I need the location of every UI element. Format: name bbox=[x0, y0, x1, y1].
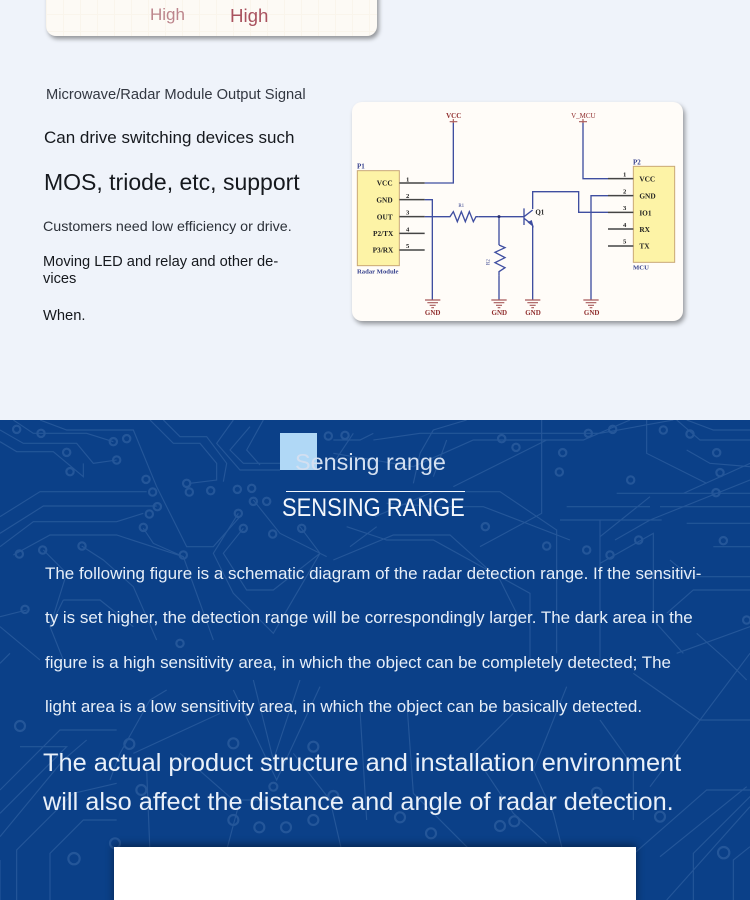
component labels: R1 bbox=[458, 204, 465, 209]
pin stubs and numbers: 5 bbox=[406, 243, 410, 250]
pin stubs and numbers: 2 bbox=[406, 193, 410, 200]
power labels: GND bbox=[525, 309, 541, 317]
text: structure and environment note: will also affect the distance and angle of radar detection. bbox=[43, 788, 674, 816]
pin stubs and numbers: 5 bbox=[623, 239, 627, 246]
text: moving LED and relay: Moving LED and relay and other de- bbox=[43, 254, 278, 270]
text: customers need low efficiency: Customers need low efficiency or drive. bbox=[43, 219, 292, 235]
P2 MCU block: P2 bbox=[633, 159, 641, 167]
pin stubs and numbers: 1 bbox=[623, 172, 626, 179]
panel: schematic card bbox=[352, 102, 683, 321]
heading: module output signal: Microwave/Radar Module Output Signal bbox=[46, 86, 306, 102]
text: can drive switching devices: Can drive switching devices such bbox=[44, 128, 294, 147]
component labels: R2 bbox=[486, 259, 491, 265]
circuit board background pattern bbox=[0, 420, 750, 900]
P2 MCU block: MCU bbox=[633, 264, 649, 271]
P1 radar module block: P1 bbox=[357, 163, 365, 171]
chart: radar to MCU circuit schematic bbox=[356, 112, 676, 317]
P1 radar module block: OUT bbox=[377, 212, 393, 221]
power labels: GND bbox=[492, 309, 507, 317]
P1 radar module block: VCC bbox=[377, 179, 393, 188]
P2 MCU block: GND bbox=[639, 191, 656, 200]
pin stubs and numbers: 1 bbox=[406, 177, 409, 184]
accent light blue square bbox=[280, 433, 317, 470]
pin stubs and numbers bbox=[399, 172, 633, 250]
heading divider line bbox=[286, 491, 465, 492]
power labels: GND bbox=[425, 309, 440, 317]
panel: white diagram card bbox=[114, 847, 636, 900]
power labels: V_MCU bbox=[571, 112, 596, 120]
P1 radar module block: Radar Module bbox=[357, 269, 399, 276]
wires bbox=[425, 122, 608, 300]
heading: sensing range: Sensing range bbox=[295, 449, 446, 475]
P2 MCU block: RX bbox=[639, 225, 651, 234]
power labels: VCC bbox=[446, 112, 461, 120]
label: low sensitivity High: High bbox=[150, 5, 185, 24]
junction dot bbox=[498, 215, 500, 218]
component labels bbox=[458, 204, 545, 265]
P2 MCU block: IO1 bbox=[639, 208, 652, 217]
label: high sensitivity High: High bbox=[230, 5, 268, 26]
text: MOS triode: MOS, triode, etc, support bbox=[44, 169, 300, 195]
panel: sensing range blue section bbox=[0, 420, 750, 900]
text: structure and environment note: The actual product structure and installation environment bbox=[43, 748, 681, 776]
P2 MCU block: TX bbox=[639, 242, 650, 251]
text: detection range description: figure is a high sensitivity area, in which the object can be completely detected; The bbox=[45, 653, 671, 672]
pin stubs and numbers: 4 bbox=[406, 227, 410, 234]
text: detection range description: The following figure is a schematic diagram of the radar detection range. If the sensitivi- bbox=[45, 564, 701, 583]
text: moving LED and relay: vices bbox=[43, 271, 76, 287]
panel: cropped signal table card bbox=[46, 0, 377, 36]
power symbols bbox=[425, 119, 599, 308]
P1 radar module block: P2/TX bbox=[373, 229, 394, 238]
P2 MCU block bbox=[633, 159, 675, 271]
text: detection range description: light area is a low sensitivity area, in which the object can be basically detected. bbox=[45, 697, 642, 716]
P1 radar module block: P3/RX bbox=[373, 246, 394, 255]
pin stubs and numbers: 2 bbox=[623, 188, 627, 195]
P1 radar module block: GND bbox=[376, 195, 393, 204]
component labels: Q1 bbox=[535, 208, 545, 216]
P1 radar module block bbox=[357, 163, 399, 276]
text: moving LED and relay bbox=[43, 254, 278, 287]
text: structure and environment note bbox=[43, 748, 681, 816]
power labels bbox=[425, 112, 599, 317]
text: detection range description: ty is set higher, the detection range will be correspondingly larger. The dark area in the bbox=[45, 608, 693, 627]
pin stubs and numbers: 3 bbox=[623, 205, 627, 212]
heading: SENSING RANGE uppercase: SENSING RANGE bbox=[282, 494, 465, 522]
pin stubs and numbers: 4 bbox=[623, 222, 627, 229]
power labels: GND bbox=[584, 309, 599, 317]
text: when: When. bbox=[43, 308, 85, 324]
P2 MCU block: VCC bbox=[639, 175, 655, 184]
text: detection range description bbox=[45, 564, 701, 716]
pin stubs and numbers: 3 bbox=[406, 210, 410, 217]
